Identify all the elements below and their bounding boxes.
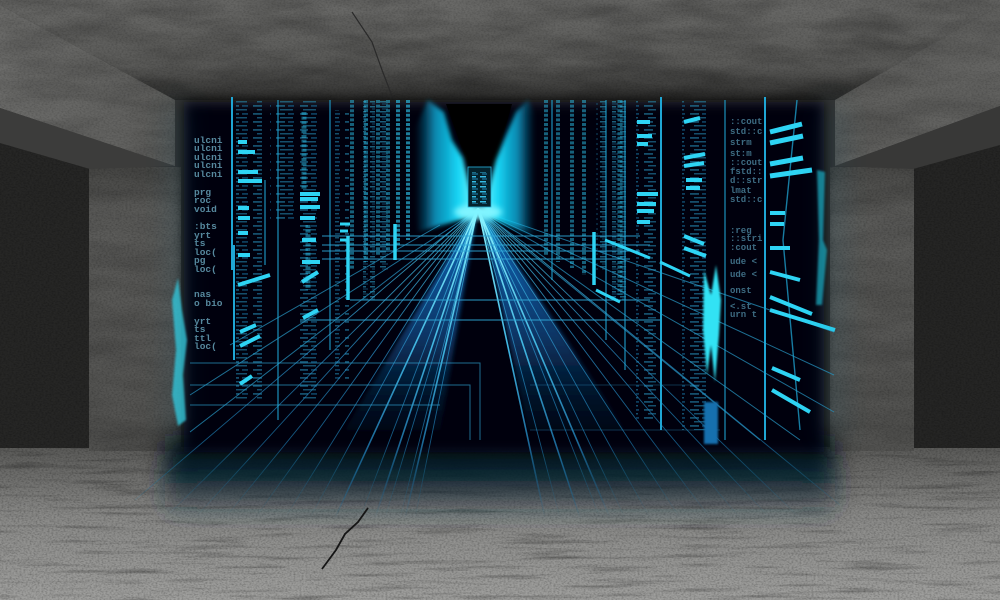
perspective rays xyxy=(135,208,840,518)
left pillar xyxy=(89,167,181,451)
code text right: std::c xyxy=(730,195,762,205)
code text right: ::cout xyxy=(730,117,762,127)
ambient side falloff xyxy=(172,105,840,440)
dense code strips near end of corridor xyxy=(304,100,620,295)
central small tower xyxy=(468,167,491,207)
code text left: ulcni xyxy=(194,160,223,171)
code text left: ulcni xyxy=(194,135,223,146)
blue floor wedges xyxy=(345,210,625,430)
code text left: roc xyxy=(194,195,211,206)
code text left: loc( xyxy=(194,341,217,352)
bright bars left xyxy=(238,142,395,384)
code text right: :reg xyxy=(730,226,752,236)
code text right: ::cout xyxy=(730,158,762,168)
code text right: lmat xyxy=(730,186,752,196)
panel background xyxy=(184,102,824,452)
bright wall glow right xyxy=(484,100,544,238)
floor xyxy=(0,447,1000,600)
code text right: :cout xyxy=(730,243,757,253)
code text left: ts xyxy=(194,324,206,335)
code text left: ts xyxy=(194,238,206,249)
code text left: nas xyxy=(194,289,211,300)
code text right: <.st xyxy=(730,302,752,312)
code text right: d::str xyxy=(730,176,762,186)
code text left xyxy=(194,135,223,352)
code text right: urn t xyxy=(730,310,757,320)
code text left: yrt xyxy=(194,230,211,241)
code text left: loc( xyxy=(194,264,217,275)
digital panel xyxy=(135,97,840,518)
wall perspective lines xyxy=(190,210,834,440)
code text right xyxy=(730,117,763,320)
bright bars right xyxy=(594,118,835,412)
code text left: loc( xyxy=(194,247,217,258)
dark opening right xyxy=(913,145,1000,448)
code text right: fstd:: xyxy=(730,167,762,177)
vertical light lines xyxy=(232,97,800,440)
blue reflection of disc xyxy=(704,402,718,444)
code text right: onst xyxy=(730,286,752,296)
cyan disc left xyxy=(172,278,187,426)
corridor end: black notch xyxy=(446,104,512,166)
code text left: yrt xyxy=(194,316,211,327)
code text left: void xyxy=(194,204,217,215)
code text left: ulcni xyxy=(194,143,223,154)
cyan disc centre right xyxy=(703,265,721,382)
ceiling xyxy=(0,0,1000,100)
code text left: ttl xyxy=(194,333,211,344)
code text left: ulcni xyxy=(194,169,223,180)
cyan strip right edge xyxy=(816,170,827,305)
left beam xyxy=(0,5,175,169)
floor crack xyxy=(322,508,368,569)
code text left: :bts xyxy=(194,221,217,232)
right beam xyxy=(835,5,1000,169)
code text left: prg xyxy=(194,187,211,198)
right pillar xyxy=(830,167,914,451)
code text left: ulcni xyxy=(194,152,223,163)
code text right: strm xyxy=(730,138,752,148)
horizontal grid lines xyxy=(190,236,720,440)
code text right: std::c xyxy=(730,127,762,137)
dim code columns xyxy=(236,100,706,430)
code text right: ::stri xyxy=(730,234,763,244)
vanishing point flare xyxy=(454,205,502,219)
floor reflection glow xyxy=(165,436,835,520)
code text right: ude < xyxy=(730,270,757,280)
code text left: o bio xyxy=(194,298,223,309)
code text right: ude < xyxy=(730,257,757,267)
code text left: pg xyxy=(194,255,206,266)
dark opening left xyxy=(0,143,90,448)
bright wall glow left xyxy=(410,100,474,232)
code text right: st:m xyxy=(730,149,752,159)
